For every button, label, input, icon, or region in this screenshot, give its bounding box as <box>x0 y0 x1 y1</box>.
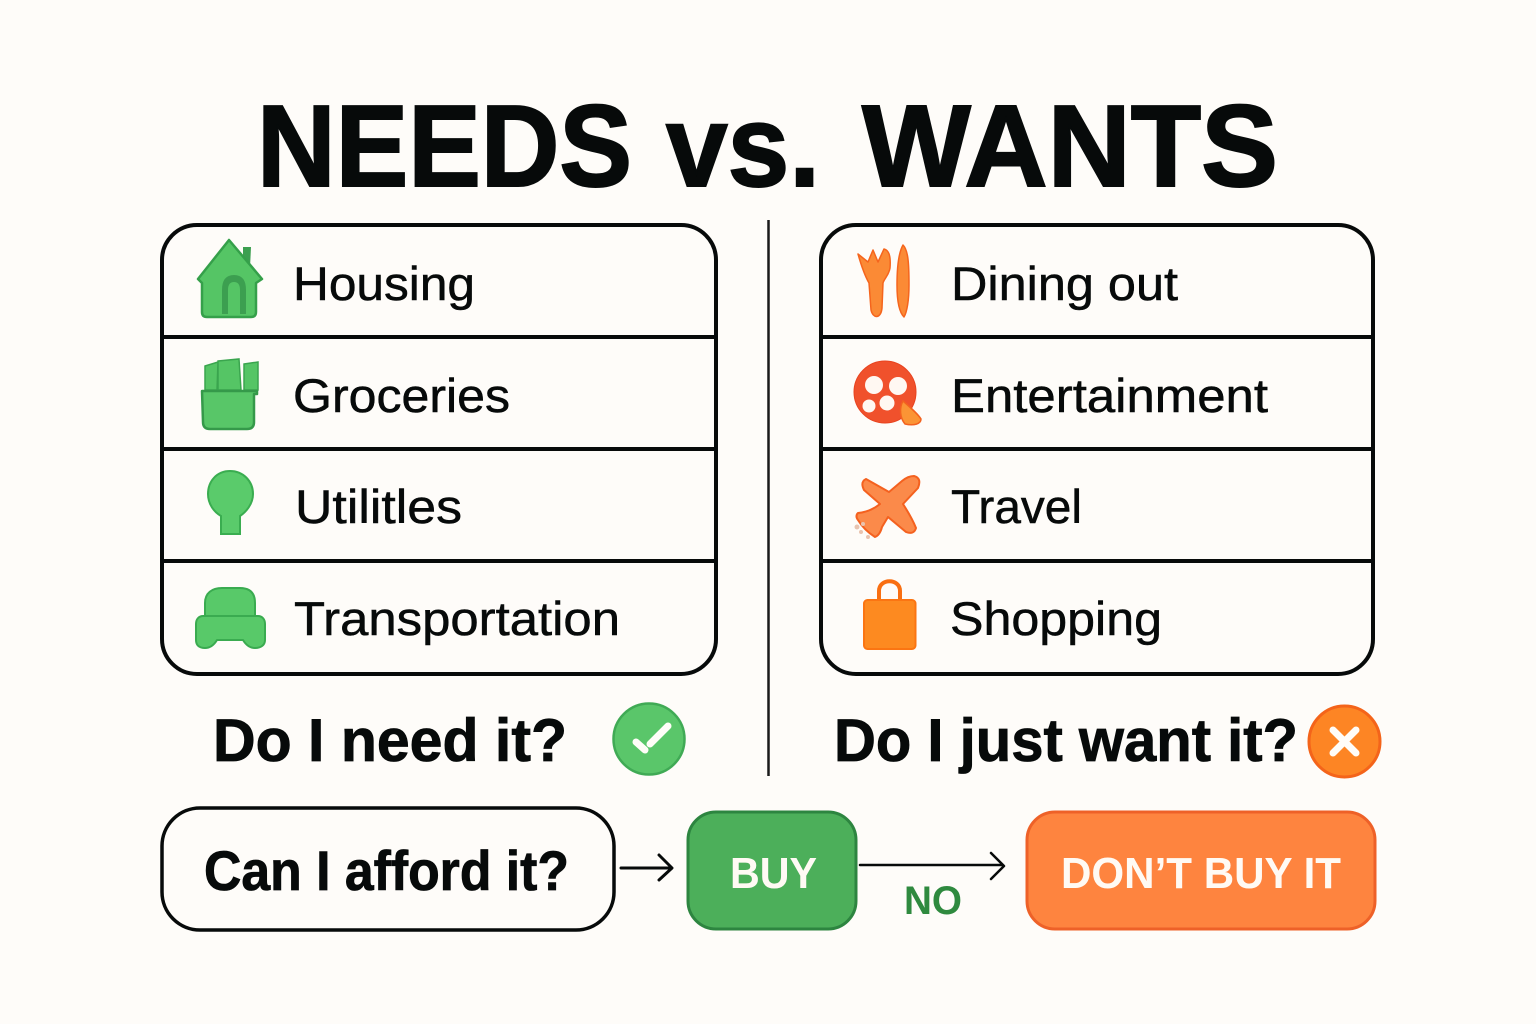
panel: wants <box>821 225 1373 674</box>
label: entertainment: Entertainment <box>951 369 1268 422</box>
question: do I just want it: Do I just want it? <box>834 707 1298 774</box>
question: do I need it: Do I need it? <box>213 707 567 774</box>
title: NEEDS <box>257 81 632 211</box>
panel: needs <box>162 225 716 674</box>
label: housing: Housing <box>293 257 475 310</box>
label: can I afford it: Can I afford it? <box>204 839 569 902</box>
label: shopping: Shopping <box>950 592 1162 645</box>
center divider <box>767 220 770 776</box>
icon: light bulb <box>208 471 253 534</box>
icon: airplane <box>854 476 919 539</box>
button: don't buy it <box>1027 812 1375 929</box>
icon: groceries <box>202 359 258 429</box>
label: don't buy it: DON’T BUY IT <box>1061 849 1341 898</box>
label: dining out: Dining out <box>951 257 1178 310</box>
icon: film reel <box>854 361 921 425</box>
label: buy: BUY <box>730 849 817 898</box>
label: travel: Travel <box>951 480 1082 533</box>
title: WANTS <box>862 81 1278 211</box>
label: transportation: Transportation <box>294 592 620 645</box>
icon: shopping bag <box>864 581 916 649</box>
icon: house <box>198 240 262 317</box>
box: can I afford it <box>162 808 614 930</box>
icon: car <box>196 588 265 648</box>
icon: fork and knife <box>858 245 909 317</box>
title: vs. <box>666 81 820 211</box>
label: utilities: Utilitles <box>295 480 462 533</box>
label: groceries: Groceries <box>293 369 510 422</box>
arrow: to buy <box>621 855 672 880</box>
title <box>257 81 1278 211</box>
icon: check badge <box>614 704 684 774</box>
label: no: NO <box>904 879 962 923</box>
button: buy <box>688 812 856 929</box>
arrow: no <box>860 853 1004 879</box>
icon: cross badge <box>1309 706 1380 777</box>
